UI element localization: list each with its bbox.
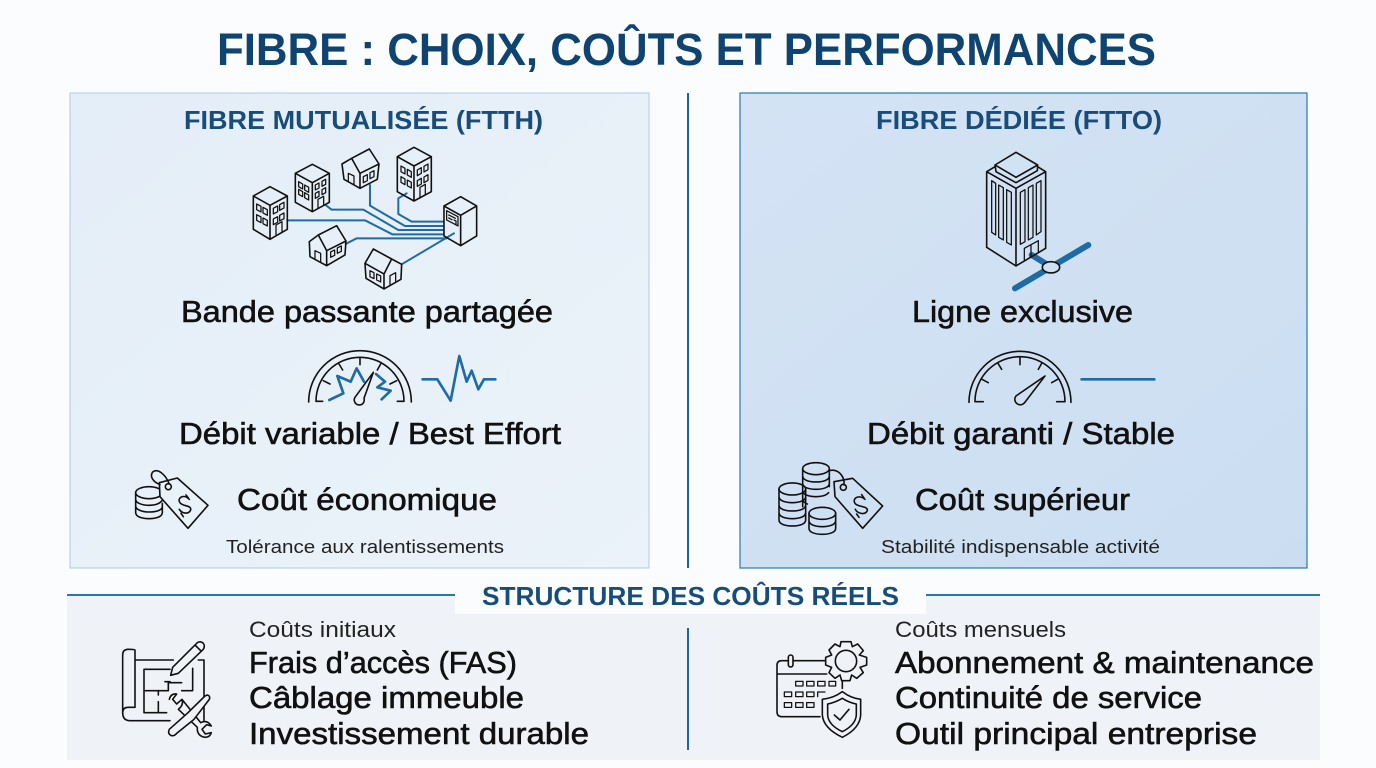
text block: coûts mensuels xyxy=(895,617,1314,751)
icon: stable speed gauge xyxy=(969,351,1154,405)
text block: coûts initiaux: Frais d’accès (FAS) xyxy=(249,645,517,680)
icon: office tower with dedicated line xyxy=(987,152,1088,288)
label: bande passante: Bande passante partagée xyxy=(181,294,553,329)
panel: fibre mutualisée xyxy=(70,93,649,568)
label: débit garanti: Débit garanti / Stable xyxy=(867,416,1175,451)
text block: coûts mensuels: Abonnement & maintenance xyxy=(895,645,1314,680)
icon: blueprint and tools xyxy=(123,642,211,737)
note: stabilité: Stabilité indispensable activité xyxy=(881,537,1160,557)
text block: coûts initiaux: Investissement durable xyxy=(249,716,589,751)
divider between panels xyxy=(687,93,689,568)
label: coût supérieur: Coût supérieur xyxy=(915,482,1130,517)
text block: coûts initiaux: Coûts initiaux xyxy=(249,617,396,642)
text block: coûts mensuels: Outil principal entreprise xyxy=(895,716,1257,751)
text block: coûts initiaux xyxy=(249,617,589,751)
heading: structure: STRUCTURE DES COÛTS RÉELS xyxy=(482,581,899,611)
icon: shared network xyxy=(253,147,477,289)
label: coût économique: Coût économique xyxy=(237,482,497,517)
heading: FTTO: FIBRE DÉDIÉE (FTTO) xyxy=(876,105,1162,135)
icon: coins and price tag xyxy=(136,471,208,528)
heading: FTTH: FIBRE MUTUALISÉE (FTTH) xyxy=(184,105,543,135)
note: tolérance: Tolérance aux ralentissements xyxy=(226,537,504,557)
panel: structure des coûts xyxy=(67,581,1320,760)
label: débit variable: Débit variable / Best Effort xyxy=(179,416,561,451)
text block: coûts mensuels: Coûts mensuels xyxy=(895,617,1066,642)
text block: coûts mensuels: Continuité de service xyxy=(895,680,1202,715)
title: FIBRE : CHOIX, COÛTS ET PERFORMANCES xyxy=(217,24,1156,75)
icon: variable speed gauge xyxy=(309,351,495,405)
text block: coûts initiaux: Câblage immeuble xyxy=(249,680,524,715)
icon: calendar, gear and shield xyxy=(777,642,867,737)
label: ligne exclusive: Ligne exclusive xyxy=(912,294,1133,329)
icon: coin stacks and price tag xyxy=(779,463,883,534)
panel: fibre dédiée xyxy=(740,93,1307,568)
